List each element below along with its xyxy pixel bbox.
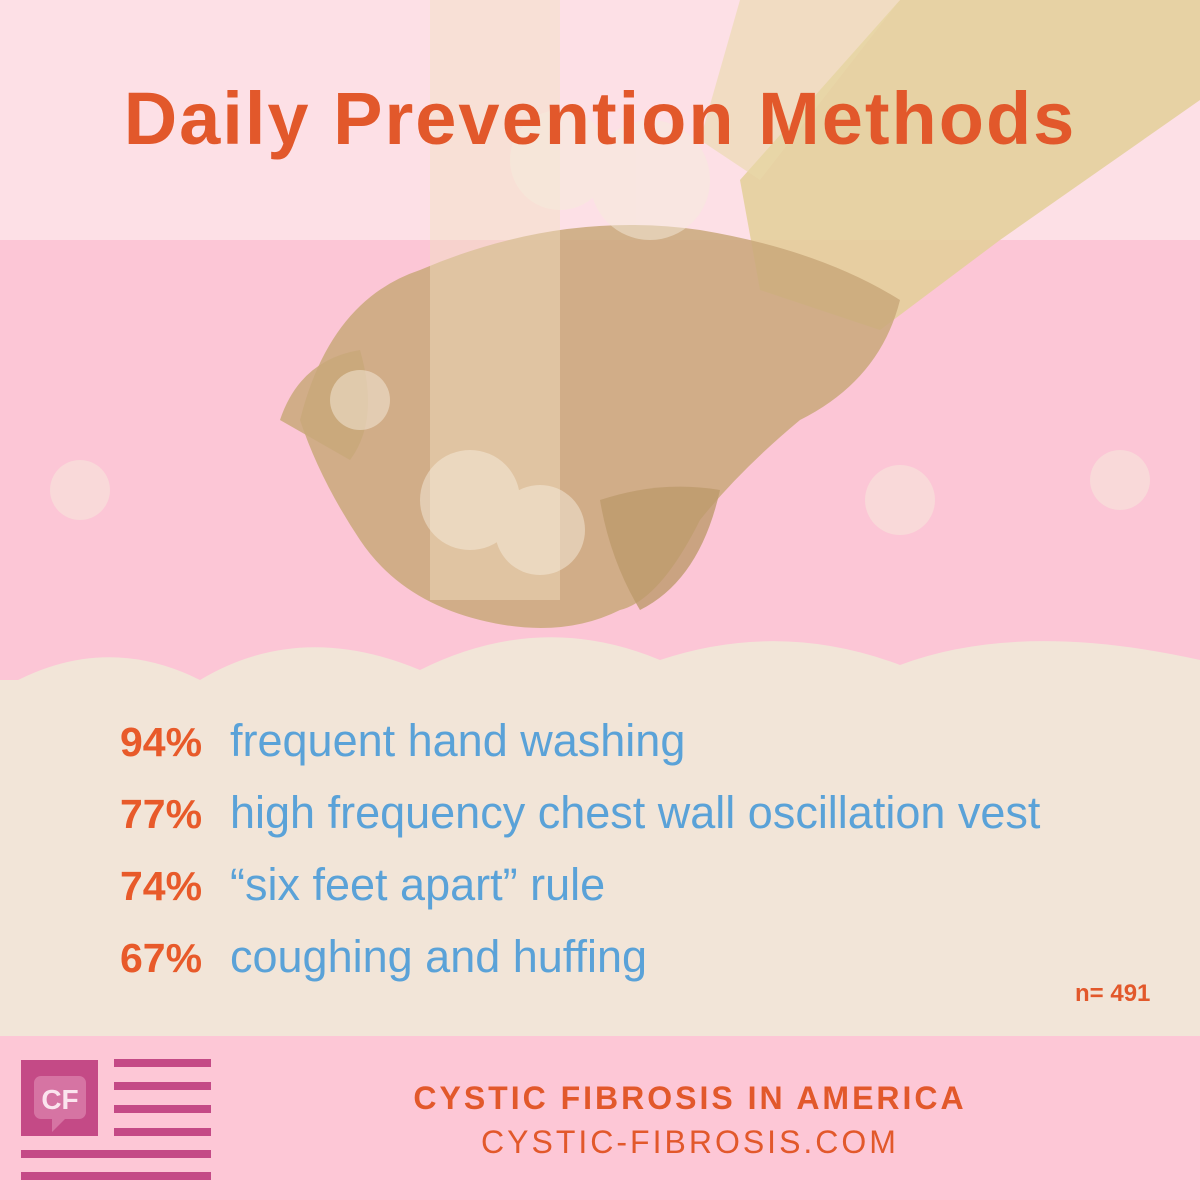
stat 94: frequent hand washing — [230, 715, 685, 766]
footer: CYSTIC-FIBROSIS.COM — [481, 1124, 899, 1160]
stat 77: 77% — [120, 791, 202, 837]
stat 74: “six feet apart” rule — [230, 859, 605, 910]
logo — [21, 1059, 211, 1180]
stat 74: 74% — [120, 863, 202, 909]
stat list — [120, 715, 1040, 982]
arm — [740, 0, 1200, 330]
stat 67: coughing and huffing — [230, 931, 647, 982]
stat 94: 94% — [120, 719, 202, 765]
hands — [300, 225, 900, 628]
foam — [50, 110, 1150, 575]
footer text: CYSTIC FIBROSIS IN AMERICA — [413, 1080, 967, 1116]
stat 77: high frequency chest wall oscillation vest — [230, 787, 1040, 838]
logo: CF — [41, 1084, 79, 1115]
water stream — [430, 0, 560, 600]
title: Daily Prevention Methods — [124, 77, 1076, 160]
footer — [0, 1036, 1200, 1200]
stat 67: 67% — [120, 935, 202, 981]
sample size: n= 491 — [1075, 980, 1150, 1007]
